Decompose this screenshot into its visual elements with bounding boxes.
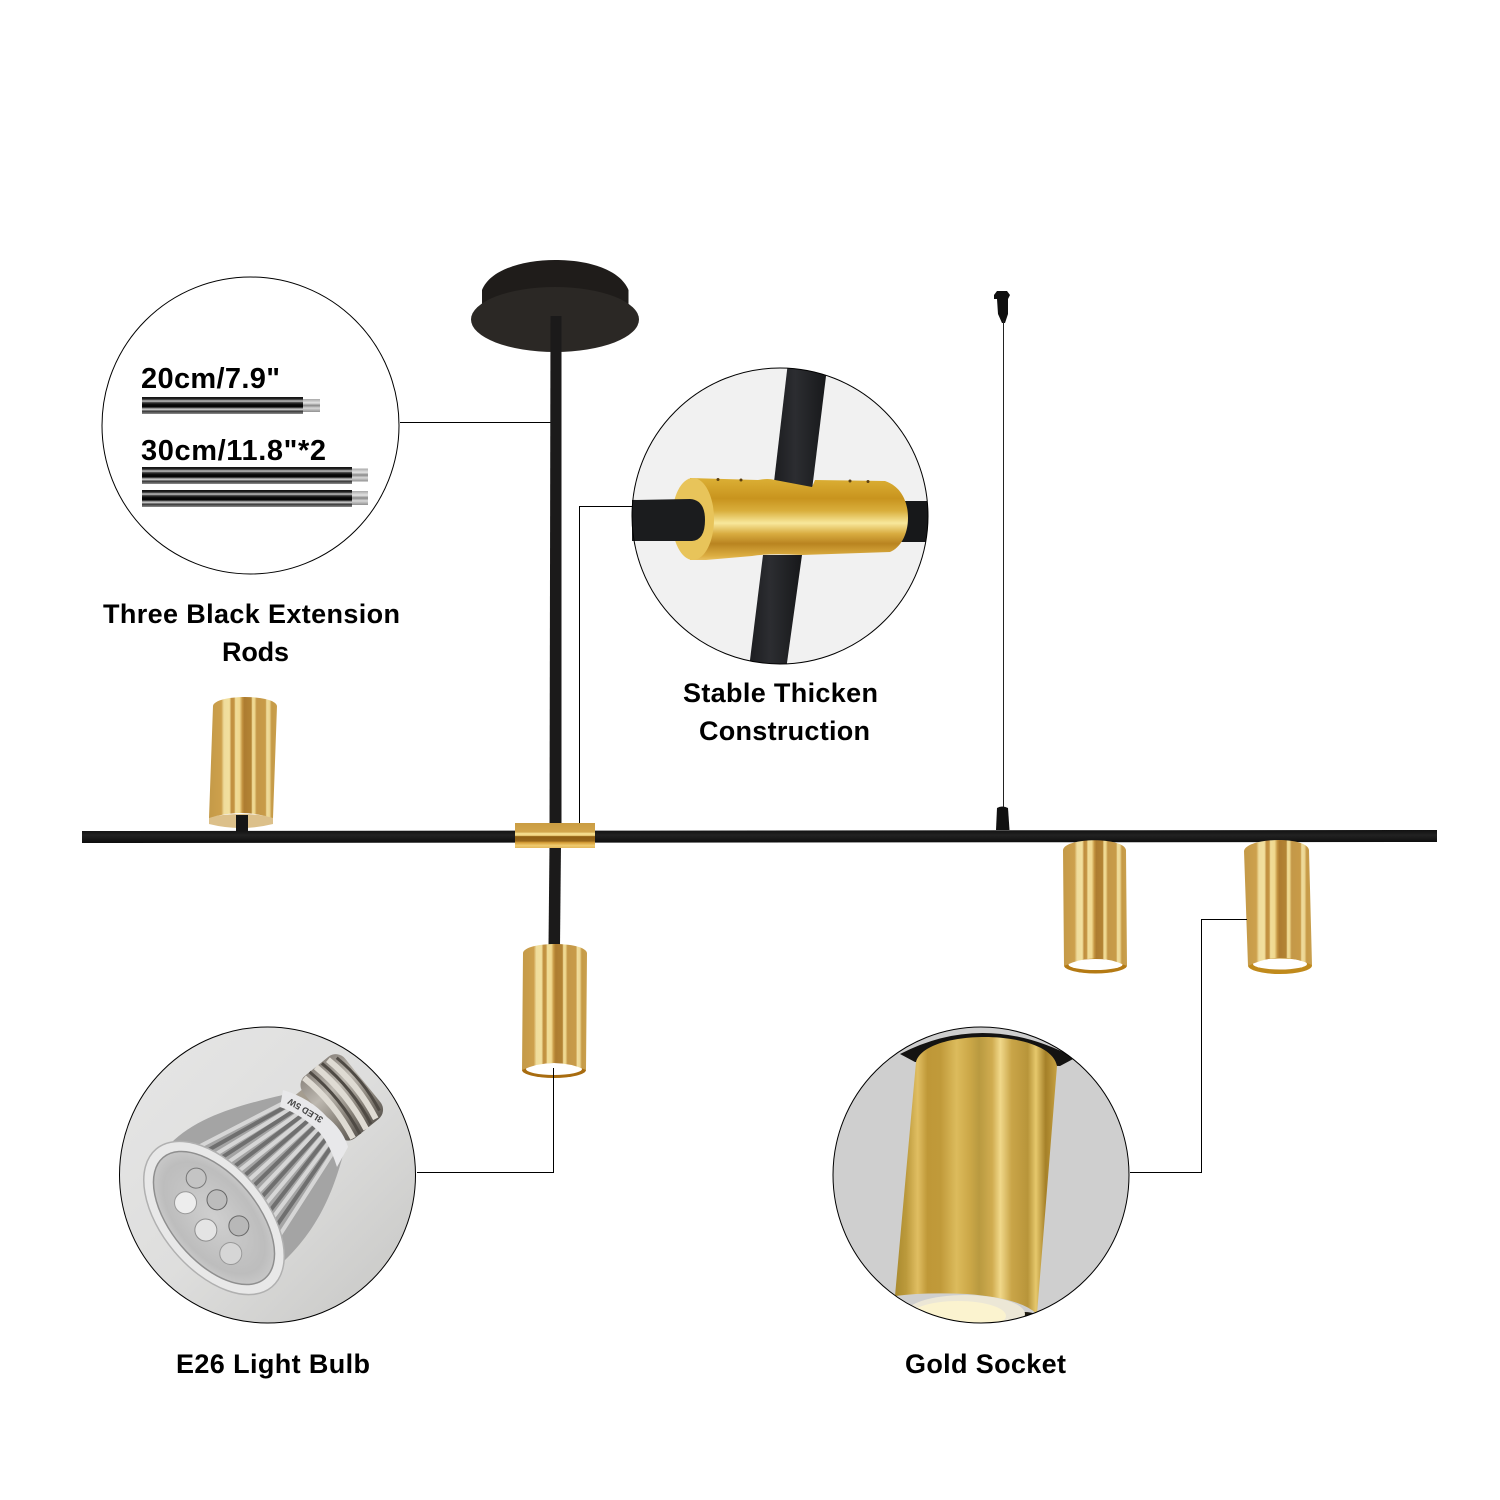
black rod entering connector xyxy=(632,499,705,541)
gold center connector xyxy=(515,823,595,848)
ceiling canopy xyxy=(471,260,639,352)
heading: extension rods xyxy=(103,599,400,667)
lit opening xyxy=(912,1295,1025,1322)
gold connector body xyxy=(632,478,908,560)
label: 30cm rods: 30cm/11.8"*2 xyxy=(141,435,326,467)
heading: light bulb: E26 Light Bulb xyxy=(176,1349,370,1379)
heading: gold socket: Gold Socket xyxy=(905,1349,1066,1379)
black sliver behind opening xyxy=(1024,1312,1033,1316)
leader line: connector to construction detail xyxy=(580,506,632,824)
gold cylinder xyxy=(895,1037,1057,1314)
panel: extension rods detail xyxy=(102,277,399,574)
black ceiling bar xyxy=(900,1033,1075,1066)
screw base xyxy=(296,1054,384,1141)
panel: gold socket detail xyxy=(833,1027,1129,1333)
gold end face xyxy=(672,478,714,560)
black vertical rod xyxy=(749,362,827,670)
gold shade: center bottom xyxy=(522,944,587,1078)
leader line: gold socket xyxy=(1130,920,1247,1172)
black horizontal rod stub xyxy=(902,501,928,542)
gold shade: top left xyxy=(209,697,277,831)
gold shade: right one xyxy=(1063,840,1127,974)
heading: construction xyxy=(683,678,878,746)
collar with print: 3LED 5W xyxy=(286,1096,325,1125)
vertical stem rod xyxy=(548,316,562,946)
long rod one xyxy=(142,467,368,484)
panel: connector detail xyxy=(632,362,932,670)
collar with print xyxy=(280,1090,348,1167)
heading: extension rods: Rods xyxy=(222,637,289,667)
long rod two xyxy=(142,490,368,507)
heading: construction: Construction xyxy=(699,716,870,746)
bulb xyxy=(143,1054,384,1296)
hanging wire with ceiling clip xyxy=(994,291,1010,830)
leader line: light bulb xyxy=(417,1068,554,1172)
heading: extension rods: Three Black Extension xyxy=(103,599,400,629)
label: 20cm rod: 20cm/7.9" xyxy=(141,363,280,395)
short rod xyxy=(142,397,320,414)
leader line: extension rods xyxy=(400,422,552,424)
gold shade: right two xyxy=(1244,840,1312,974)
finned heat sink xyxy=(165,1095,345,1262)
heading: construction: Stable Thicken xyxy=(683,678,878,708)
horizontal bar xyxy=(82,830,1437,843)
lens face xyxy=(143,1141,285,1296)
panel: light bulb detail xyxy=(116,1027,415,1323)
